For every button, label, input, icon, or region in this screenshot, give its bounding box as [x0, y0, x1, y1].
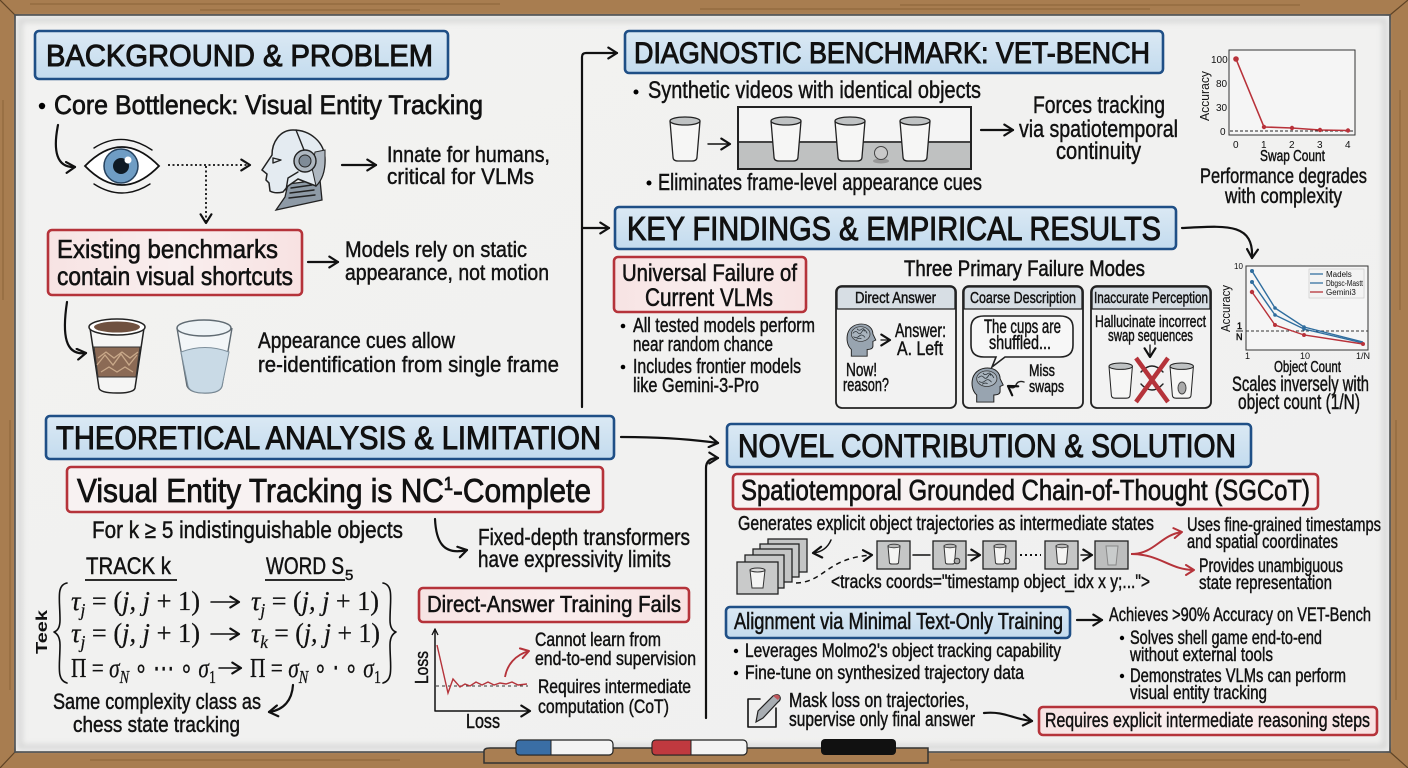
- line chart: accuracy vs object count: Madels: [1326, 270, 1352, 279]
- reduction table: τ: [251, 618, 261, 648]
- reduction table: τ: [251, 586, 261, 616]
- text: unambiguous state: Provides unambiguous: [1199, 556, 1343, 577]
- panel: direct answer: Now!: [846, 360, 877, 380]
- callout: direct-answer training fails: Direct-Answer Training Fails: [427, 591, 681, 617]
- arrow: cup to video frame: [708, 143, 730, 145]
- line chart: accuracy vs swap count: [1197, 50, 1355, 165]
- callout: nc1-complete: [67, 467, 603, 512]
- icon: single cup: [670, 117, 700, 161]
- panel: coarse description: [963, 286, 1083, 408]
- reduction table: = (: [85, 618, 122, 648]
- heading: key findings: KEY FINDINGS & EMPIRICAL RESULTS: [627, 210, 1161, 247]
- arrow to achieves: [1077, 619, 1102, 621]
- reduction table: [34, 553, 396, 687]
- text: cannot learn: Cannot learn from: [535, 630, 661, 651]
- reduction table: σ: [198, 653, 212, 683]
- text: requires intermediate computation: computation (CoT): [538, 697, 669, 718]
- text: forces tracking: Forces tracking: [1033, 92, 1165, 119]
- panel: coarse description: Miss: [1029, 361, 1055, 380]
- marker: red: [652, 740, 747, 755]
- reduction table: Π = σ: [250, 653, 302, 683]
- text: cannot learn: [535, 630, 696, 670]
- line chart: accuracy vs swap count: 1: [1261, 140, 1267, 151]
- line chart: accuracy vs object count: 10: [1234, 262, 1243, 271]
- bullet: synthetic videos: Synthetic videos with identical objects: [648, 77, 981, 104]
- arrow: trunk to vet-bench and key findings: [582, 53, 617, 407]
- core bottleneck bullet: Core Bottleneck: Visual Entity Tracking: [54, 90, 483, 120]
- text: unambiguous state: state representation: [1199, 573, 1332, 594]
- bullets: results: Demonstrates VLMs can perform: [1130, 666, 1346, 687]
- bullets: results: [1120, 628, 1346, 704]
- callout: nc1-complete: 1: [444, 474, 453, 494]
- text: same complexity class: chess state tracking: [73, 712, 240, 737]
- text: appearance cues: re-identification from single frame: [258, 352, 559, 377]
- panel: inaccurate perception: Inaccurate Perception: [1094, 290, 1208, 307]
- panel: inaccurate perception: swap sequences: [1108, 326, 1193, 345]
- text: uses timestamps: and spatial coordinates: [1187, 532, 1338, 553]
- arrow: red fork: [1131, 532, 1194, 570]
- reduction table: τ: [71, 586, 81, 616]
- arrow: trunk to solution: [706, 458, 718, 718]
- line chart: accuracy vs swap count: Accuracy: [1197, 71, 1212, 121]
- text: k at least 5: For k ≥ 5 indistinguishable objects: [92, 517, 403, 544]
- reduction table: Teek: [34, 610, 51, 654]
- panel: background and problem: [35, 31, 559, 393]
- subheading: alignment: Alignment via Minimal Text-Only Training: [734, 608, 1063, 634]
- reduction table: = (: [265, 586, 302, 616]
- line chart: accuracy vs object count: Accuracy: [1218, 285, 1233, 332]
- text: models rely on static appearance: appearance, not motion: [345, 260, 549, 285]
- arrow: dotted down to benchmarks: [205, 166, 207, 223]
- text: same complexity class: [53, 689, 261, 737]
- trajectory frames: [877, 541, 1128, 569]
- callout: nc1-complete: -Complete: [453, 472, 591, 509]
- line chart: accuracy vs swap count: 100: [1211, 55, 1228, 66]
- line chart: accuracy vs object count: 1: [1245, 351, 1250, 361]
- reduction table: = (: [85, 586, 122, 616]
- arrow: dashed frames to trajectory: [796, 555, 872, 583]
- callout: universal failure: Universal Failure of: [622, 260, 797, 287]
- bullets: universal failure: Includes frontier models: [633, 356, 801, 378]
- reduction table: τ: [71, 618, 81, 648]
- arrow: theory to solution: [621, 437, 718, 443]
- caption: performance degrades: with complexity: [1224, 185, 1342, 208]
- icon: eye: [85, 139, 159, 193]
- bullets: universal failure: [621, 315, 815, 397]
- line chart: accuracy vs swap count: 80: [1216, 79, 1228, 90]
- text: innate for humans: Innate for humans,: [387, 142, 550, 167]
- bullets: results: without external tools: [1129, 645, 1273, 666]
- text: forces tracking: continuity: [1056, 138, 1141, 165]
- panel: coarse description: swaps: [1029, 377, 1064, 396]
- arrow: findings to chart: [1182, 227, 1252, 258]
- line chart: accuracy vs swap count: 0: [1220, 127, 1226, 138]
- reduction table: 5: [345, 567, 353, 584]
- text: models rely on static appearance: Models rely on static: [345, 237, 527, 262]
- panel: theoretical analysis: [34, 416, 718, 737]
- line chart: accuracy vs swap count: 30: [1216, 103, 1228, 114]
- panel: direct answer: Direct Answer: [855, 290, 937, 307]
- arrow to models text: [308, 261, 338, 263]
- icon: pencil and box: [748, 695, 780, 727]
- panel: inaccurate perception: Hallucinate incorrect: [1095, 312, 1206, 331]
- bullets: molmo2 training: Fine-tune on synthesized trajectory data: [745, 663, 1024, 684]
- arrow: mask to requires: [984, 713, 1032, 721]
- bullets: molmo2 training: Leverages Molmo2's object tracking capability: [745, 641, 1061, 662]
- text: forces tracking: via spatiotemporal: [1019, 116, 1178, 143]
- panel: direct answer: A. Left: [897, 339, 944, 360]
- callout: universal failure: [614, 257, 806, 312]
- arrow: text to frame stack: [813, 540, 831, 553]
- arrow: dotted eye to robot: [168, 164, 250, 166]
- heading: background and problem: [35, 31, 448, 79]
- line chart: training loss: Loss: [412, 651, 432, 684]
- reduction table: σ: [363, 653, 377, 683]
- panel: direct answer: reason?: [843, 375, 889, 395]
- arrow to innate text: [342, 164, 376, 166]
- text: forces tracking: [1019, 92, 1178, 165]
- code label: tracks: <tracks coords="timestamp object_idx x y;...">: [831, 572, 1150, 593]
- callout: existing benchmarks: [48, 230, 302, 295]
- text: uses timestamps: [1187, 515, 1381, 553]
- arrow: bottleneck to eye: [56, 125, 75, 167]
- bullets: results: Solves shell game end-to-end: [1130, 628, 1322, 649]
- line chart: accuracy vs object count: Gemini3: [1326, 288, 1356, 297]
- text: appearance cues: [258, 328, 559, 377]
- callout: direct-answer training fails: [419, 588, 689, 622]
- icon: robot head: [262, 130, 325, 210]
- line chart: accuracy vs swap count: 0: [1233, 140, 1239, 151]
- reduction table: WORD S: [266, 553, 344, 580]
- line chart: accuracy vs swap count: 2: [1289, 140, 1295, 151]
- bullet: eliminates cues: Eliminates frame-level appearance cues: [658, 169, 982, 195]
- callout: universal failure: Current VLMs: [645, 284, 773, 312]
- caption: scales inversely: object count (1/N): [1238, 391, 1360, 414]
- line chart: accuracy vs object count: 1: [1237, 321, 1242, 331]
- line chart: accuracy vs object count: 1/N: [1356, 351, 1370, 361]
- panel: diagnostic benchmark: [625, 31, 1367, 208]
- arrow to expressivity: [435, 519, 467, 551]
- panel: coarse description: shuffled...: [989, 333, 1051, 354]
- subheading: alignment: [726, 607, 1070, 638]
- caption: performance degrades: Performance degrades: [1200, 165, 1367, 188]
- reduction table: j: [78, 632, 85, 652]
- line chart: accuracy vs swap count: 4: [1345, 140, 1351, 151]
- text: fixed-depth transformers: Fixed-depth transformers: [478, 524, 690, 550]
- video frame with identical cups: [738, 107, 971, 169]
- reduction table: TRACK k: [86, 553, 172, 580]
- text: same complexity class: Same complexity class as: [53, 689, 261, 714]
- caption: scales inversely: [1232, 373, 1369, 414]
- reduction table: N: [298, 667, 309, 687]
- reduction table: j, j + 1): [304, 618, 382, 648]
- text: innate for humans: critical for VLMs: [387, 164, 534, 189]
- arrow to complexity note: [269, 685, 293, 712]
- line chart: training loss: [412, 629, 530, 733]
- text: mask loss: Mask loss on trajectories,: [789, 690, 969, 712]
- heading: three failure modes: Three Primary Failure Modes: [904, 256, 1145, 281]
- arrow to forces tracking: [981, 129, 1013, 131]
- line chart: accuracy vs swap count: Swap Count: [1260, 148, 1325, 165]
- text: unambiguous state: [1199, 556, 1343, 594]
- heading: novel contribution: NOVEL CONTRIBUTION & SOLUTION: [738, 428, 1236, 464]
- heading: vet-bench: DIAGNOSTIC BENCHMARK: VET-BENCH: [634, 37, 1150, 70]
- text: requires intermediate computation: [538, 677, 691, 718]
- text: requires intermediate computation: Requires intermediate: [538, 677, 691, 698]
- text: appearance cues: Appearance cues allow: [258, 328, 455, 353]
- marker: black: [821, 739, 896, 755]
- reduction table: j, j + 1): [122, 618, 201, 648]
- caption: performance degrades: [1200, 165, 1367, 208]
- heading: theoretical analysis: THEORETICAL ANALYSIS & LIMITATION: [56, 420, 601, 456]
- reduction table: = (: [268, 618, 304, 648]
- reduction table: j, j + 1): [122, 586, 201, 616]
- bullets: results: visual entity tracking: [1130, 683, 1267, 704]
- reduction table: ∘ ⋅ ∘: [308, 653, 363, 683]
- text: fixed-depth transformers: have expressivity limits: [478, 546, 671, 572]
- reduction table: 1: [374, 667, 381, 687]
- line chart: accuracy vs object count: Object Count: [1274, 359, 1341, 376]
- text: models rely on static appearance: [345, 237, 549, 285]
- panel: coarse description: Coarse Description: [970, 290, 1076, 307]
- icon: coffee cup: [89, 319, 145, 393]
- text: fixed-depth transformers: [478, 524, 690, 572]
- text: generates trajectories: Generates explicit object trajectories as intermediate states: [738, 513, 1154, 535]
- bullets: universal failure: near random chance: [633, 334, 773, 356]
- text: mask loss: [789, 690, 975, 731]
- text: cannot learn: end-to-end supervision: [535, 649, 696, 670]
- reduction table: j, j + 1): [302, 586, 381, 616]
- bullets: universal failure: like Gemini-3-Pro: [633, 375, 759, 397]
- marker tray: [484, 739, 928, 763]
- panel: direct answer: [836, 286, 956, 408]
- line chart: accuracy vs swap count: 3: [1317, 140, 1323, 151]
- reduction table: Π = σ: [71, 653, 122, 683]
- callout: nc1-complete: Visual Entity Tracking is NC: [77, 472, 482, 509]
- panel: key findings: [614, 207, 1370, 414]
- panel: direct answer: Answer:: [895, 321, 946, 342]
- reduction table: 1: [209, 667, 216, 687]
- text: mask loss: supervise only final answer: [789, 709, 975, 731]
- panel: coarse description: The cups are: [984, 317, 1061, 338]
- reduction table: j: [78, 600, 85, 620]
- bullets: universal failure: All tested models perform: [633, 315, 815, 337]
- line chart: accuracy vs object count: 10: [1300, 351, 1310, 361]
- icon: glass of water: [177, 320, 232, 393]
- reduction table: k: [260, 632, 269, 652]
- line chart: accuracy vs object count: N: [1236, 332, 1242, 342]
- line chart: accuracy vs object count: [1218, 262, 1370, 376]
- line chart: training loss: Loss: [466, 711, 500, 733]
- arrow: red curve to caption: [505, 651, 529, 677]
- panel: inaccurate perception: [1091, 286, 1211, 408]
- panel: novel contribution: [726, 424, 1381, 735]
- marker: blue: [516, 740, 613, 755]
- heading: background and problem: BACKGROUND & PROBLEM: [46, 38, 433, 73]
- arrow to cups: [65, 302, 86, 353]
- reduction table: ∘ ⋯ ∘: [129, 653, 198, 683]
- reduction table: N: [119, 667, 130, 687]
- icon: stack of video frames: [737, 539, 807, 594]
- callout: existing benchmarks: Existing benchmarks: [57, 234, 278, 264]
- line chart: accuracy vs object count: Dbgsc-Mastt: [1326, 279, 1364, 288]
- text: innate for humans: [387, 142, 550, 189]
- callout: existing benchmarks: contain visual shortcuts: [57, 261, 293, 291]
- bullets: molmo2 training: [734, 641, 1061, 684]
- reduction table: j: [258, 600, 265, 620]
